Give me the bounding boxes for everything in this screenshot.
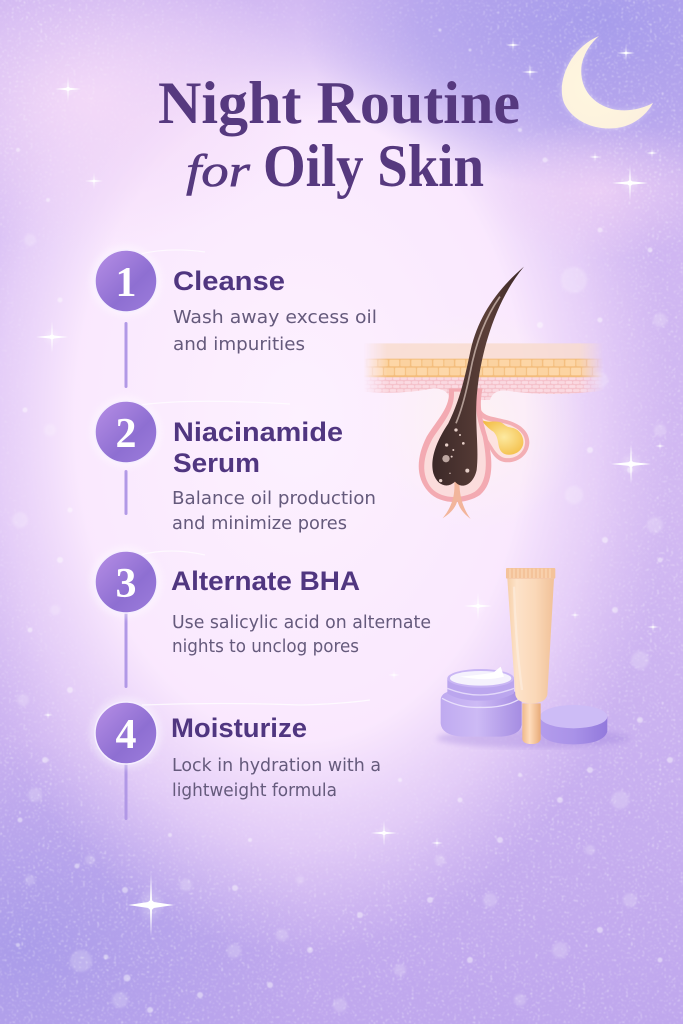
- step 3: alternate BHA: [90, 546, 431, 688]
- step 4 number badge: 4: [116, 712, 136, 758]
- step 1 number badge: [90, 245, 162, 317]
- dermis layer: [363, 377, 603, 400]
- step 4 number badge: [90, 697, 162, 769]
- illustration: skincare products: [437, 568, 630, 748]
- step 2 number badge: [90, 396, 162, 468]
- fat cell layer: [363, 359, 603, 377]
- step 1 description: Wash away excess oil: [173, 308, 377, 328]
- tube nozzle: [522, 703, 541, 744]
- step 4 description: Lock in hydration with a: [172, 756, 381, 776]
- skin layers band: [363, 343, 603, 400]
- icon: crescent moon: [562, 36, 653, 128]
- step 4 description: [172, 756, 381, 801]
- step 4 description: lightweight formula: [172, 781, 337, 801]
- step 2 description: and minimize pores: [172, 514, 347, 534]
- step 3 description: Use salicylic acid on alternate: [172, 613, 431, 633]
- step 1 description: [173, 308, 377, 355]
- step 2 number badge: 2: [116, 411, 136, 457]
- step 2 heading: Niacinamide: [173, 417, 343, 447]
- step 3 accent arc: [140, 551, 205, 555]
- tube cap: [506, 568, 555, 579]
- skin surface layer: [363, 343, 603, 359]
- step 2 description: Balance oil production: [172, 489, 376, 509]
- jar lid: [540, 705, 607, 744]
- step 1 description: and impurities: [173, 335, 305, 355]
- step 2: niacinamide serum: [90, 396, 376, 534]
- title: for: [186, 145, 251, 196]
- step 3 number badge: [90, 546, 162, 618]
- hair follicle sheath: [419, 388, 491, 502]
- step 1 number badge: 1: [116, 260, 136, 306]
- step 3 connector: [124, 612, 128, 688]
- step 3 description: [172, 613, 431, 657]
- step 3 description: nights to unclog pores: [172, 637, 359, 657]
- step 1 accent arc: [140, 250, 205, 254]
- step 4: moisturize: [90, 697, 381, 820]
- step 1: cleanse: [90, 245, 377, 388]
- hair root: [443, 482, 471, 519]
- step 1 heading: Cleanse: [173, 266, 285, 296]
- step 4 heading: Moisturize: [171, 713, 307, 743]
- hair shaft and bulb: [432, 267, 524, 486]
- illustration: hair follicle and skin layers: [363, 267, 603, 530]
- step 3 heading: Alternate BHA: [171, 566, 360, 596]
- oil gland: [479, 407, 529, 462]
- step 2 description: [172, 489, 376, 534]
- title: Oily Skin: [263, 133, 484, 199]
- step 1 connector: [124, 322, 128, 388]
- product shadow: [437, 729, 630, 748]
- step 2 accent arc: [140, 401, 290, 405]
- step 2 connector: [124, 470, 128, 515]
- step 4 accent arc: [142, 700, 370, 705]
- step 4 connector: [124, 763, 128, 820]
- tube body: [507, 579, 554, 703]
- title: Night Routine: [158, 70, 520, 136]
- cream jar: [441, 667, 522, 737]
- step 3 number badge: 3: [116, 561, 136, 607]
- step 2 heading: [173, 417, 343, 478]
- title: [158, 70, 520, 199]
- step 2 heading: Serum: [173, 448, 260, 478]
